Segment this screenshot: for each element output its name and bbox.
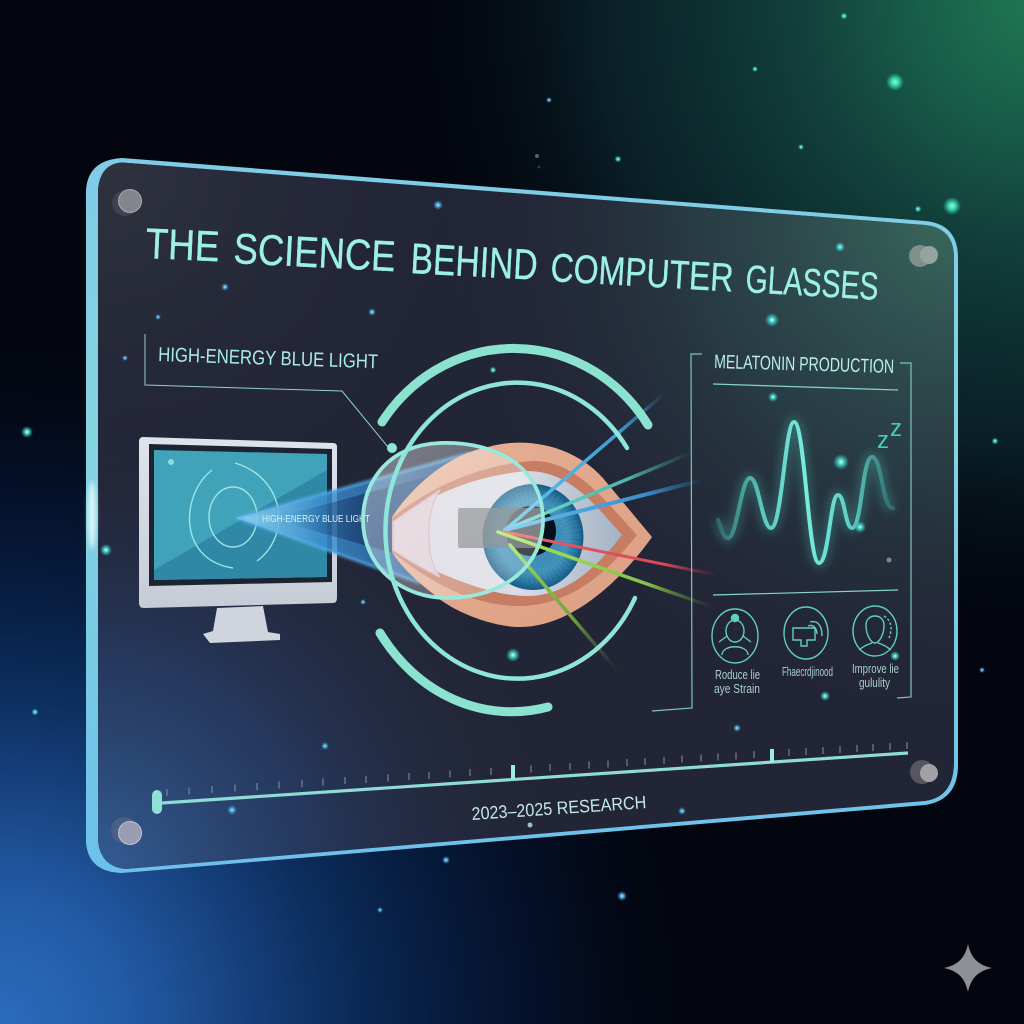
glasses lens [363, 443, 543, 598]
sleep symbol: z [877, 427, 889, 454]
corner screw top left [112, 190, 142, 216]
blue light beam [236, 453, 470, 600]
glass plate face [98, 162, 954, 869]
panel: melatonin production [652, 351, 911, 711]
corner screw top right [909, 245, 938, 267]
monitor body [139, 437, 337, 608]
title: THE [145, 220, 221, 271]
icon: focus [784, 607, 828, 659]
title: BEHIND [409, 235, 539, 290]
label: reduce eye strain: aye Strain [714, 681, 760, 696]
panel: glass plate [86, 158, 958, 873]
iris [482, 484, 584, 590]
eye illustration [392, 443, 652, 627]
melatonin heading: MELATONIN PRODUCTION [714, 351, 894, 378]
inner ring arc [385, 383, 635, 679]
icon: sleep quality [853, 606, 897, 656]
label: improve quality: gululity [859, 675, 890, 690]
outer bottom arc [380, 633, 548, 712]
label: reduce eye strain: Roduce lie [715, 667, 760, 682]
sleep symbol: z [890, 415, 902, 442]
eye lid band [392, 461, 637, 606]
title: GLASSES [744, 258, 880, 309]
timeline start knob [152, 790, 162, 814]
icon: eye strain [712, 609, 758, 663]
timeline [152, 742, 908, 824]
monitor stand [203, 606, 280, 643]
sclera [393, 471, 622, 596]
panel star particles [100, 200, 900, 828]
melatonin wave chart [718, 422, 893, 563]
callout: high-energy blue light [145, 334, 397, 453]
title: SCIENCE [232, 225, 397, 281]
title: COMPUTER [549, 246, 735, 301]
icon: computer monitor [139, 437, 337, 643]
timeline line [162, 753, 908, 803]
glass plate edge [86, 158, 958, 873]
timeline markers [513, 749, 772, 779]
label: improve quality: Improve lie [852, 661, 899, 676]
monitor screen [154, 450, 327, 580]
inner corner fold [393, 490, 440, 577]
timeline ticks [167, 742, 907, 796]
gray label box [458, 508, 542, 548]
outer top arc [382, 348, 648, 425]
sleep symbol [877, 415, 902, 454]
eye skin [392, 443, 652, 627]
light rays [498, 393, 717, 670]
corner screw bottom right [910, 760, 938, 784]
blue light beam: HIGH-ENERGY BLUE LIGHT [262, 513, 370, 525]
icon: sparkle watermark [944, 944, 992, 992]
corner screw bottom left [111, 817, 142, 844]
label: focus: Fhaecrdjinood [782, 664, 833, 679]
label: reduce eye strain [714, 667, 760, 696]
title [145, 220, 880, 309]
panel brackets [652, 354, 911, 711]
callout: high-energy blue light: HIGH-ENERGY BLUE LIGHT [158, 344, 378, 373]
label: improve quality [852, 661, 899, 690]
timeline label: 2023–2025 RESEARCH [471, 792, 647, 824]
